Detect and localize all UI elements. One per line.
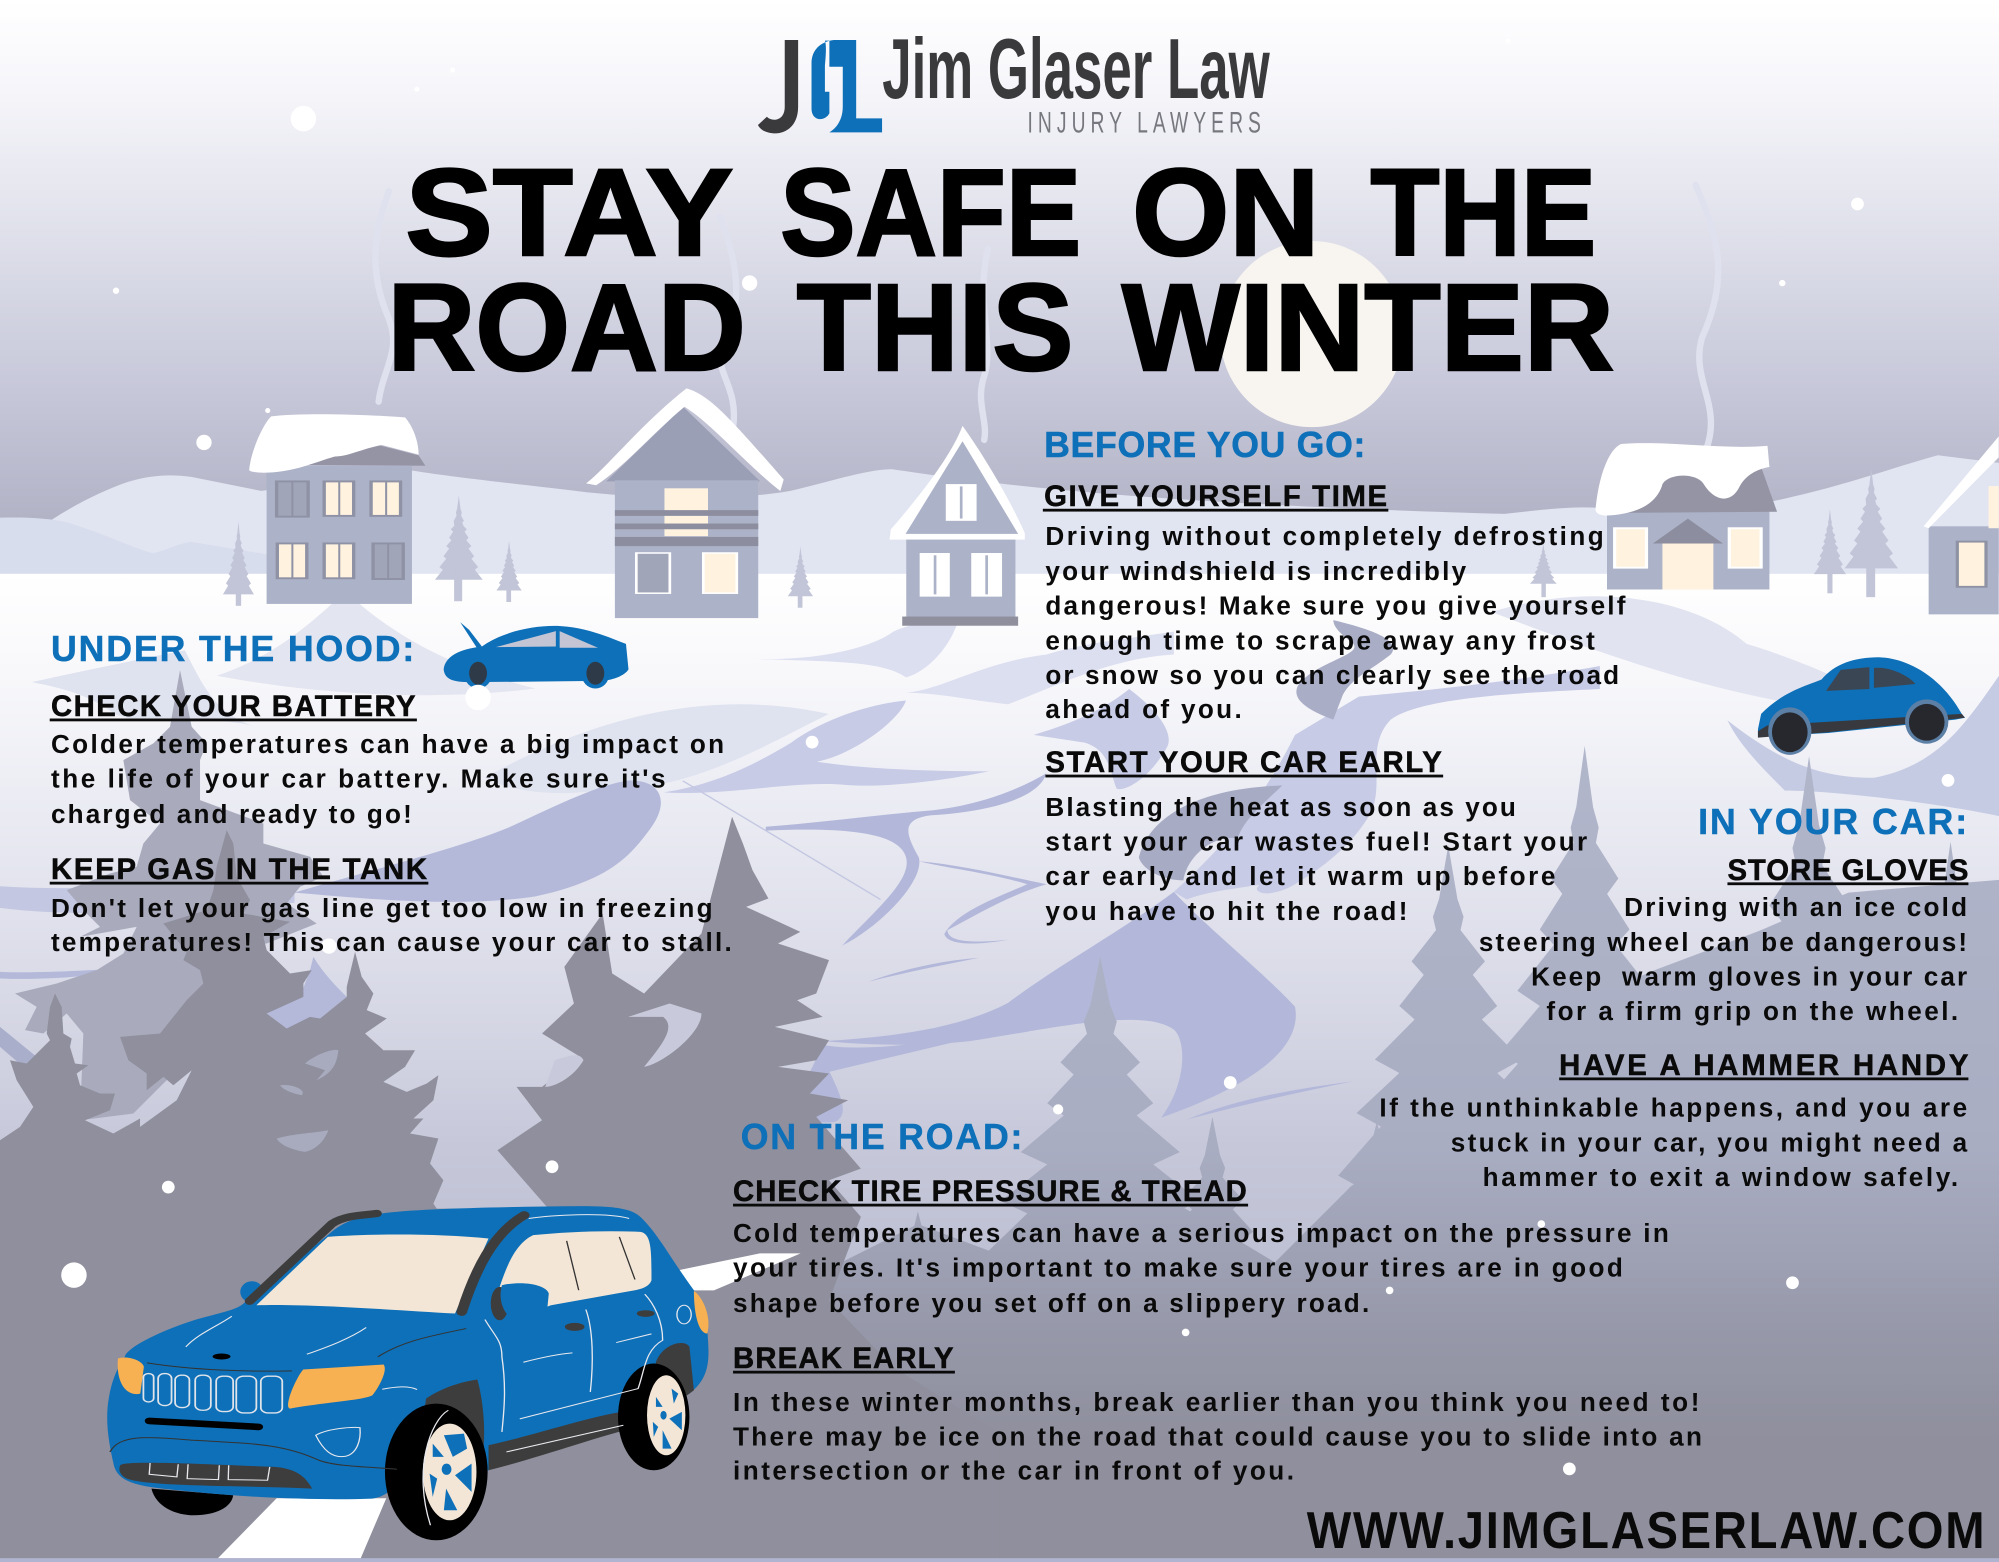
tip: check tire pressure and tread: CHECK TIRE PRESSURE & TREAD [733, 1175, 1247, 1208]
logo mark JGL [758, 40, 882, 133]
tip: have a hammer handy: stuck in your car, you might need a [1451, 1127, 1968, 1157]
tip: give yourself time: your windshield is incredibly [1045, 556, 1467, 586]
bumper and details [119, 1463, 312, 1489]
section: in your car [1379, 802, 1969, 1192]
snowfield [0, 574, 1999, 1562]
tip: give yourself time: or snow so you can clearly see the road [1045, 660, 1619, 690]
tip: keep gas in the tank: KEEP GAS IN THE TANK [51, 853, 427, 886]
road stripe [218, 1253, 801, 1558]
tip: check your battery: CHECK YOUR BATTERY [51, 690, 416, 723]
left background pine trees and lower-left drifts [0, 670, 347, 1120]
title: THE [1370, 144, 1596, 282]
tip: start your car early [1045, 746, 1587, 926]
title: ROAD [388, 259, 746, 397]
tip: store gloves: Keep warm gloves in your car [1531, 962, 1967, 992]
grille [143, 1374, 282, 1413]
title: SAFE [780, 144, 1081, 282]
house 5 [1924, 436, 1999, 614]
house 3 [890, 426, 1025, 626]
title: STAY [405, 144, 733, 282]
tip: store gloves [1479, 854, 1968, 1026]
tip: check your battery: Colder temperatures can have a big impact on [51, 729, 724, 759]
wheel arches [417, 1380, 484, 1464]
title: WINTER [1122, 259, 1614, 397]
tip: give yourself time: GIVE YOURSELF TIME [1044, 480, 1387, 513]
left and right blue drifts [0, 676, 1999, 913]
house group right [1530, 436, 1999, 755]
tip: break early: BREAK EARLY [733, 1342, 954, 1375]
tip: check tire pressure and tread [733, 1175, 1669, 1318]
heading: IN YOUR CAR: [1698, 802, 1967, 842]
tip: break early [733, 1342, 1702, 1486]
smoke wisps [375, 185, 1718, 459]
tip: start your car early: START YOUR CAR EARLY [1045, 746, 1442, 779]
tip: have a hammer handy: HAVE A HAMMER HANDY [1559, 1049, 1969, 1082]
front wheel [385, 1404, 488, 1540]
heading: ON THE ROAD: [741, 1117, 1022, 1157]
logo [758, 22, 1270, 140]
house 2 [586, 388, 784, 618]
large blue SUV [107, 1206, 709, 1540]
logo tagline: INJURY LAWYERS [1028, 107, 1266, 140]
tip: start your car early: car early and let it warm up before [1045, 861, 1555, 891]
tip: keep gas in the tank: Don't let your gas line get too low in freezing [51, 893, 713, 923]
section: on the road [733, 1117, 1702, 1486]
heading: UNDER THE HOOD: [51, 629, 414, 669]
tip: keep gas in the tank [50, 853, 732, 957]
moon [1220, 241, 1404, 427]
title: THIS [797, 259, 1073, 397]
tip: have a hammer handy: If the unthinkable happens, and you are [1379, 1092, 1967, 1122]
tip: break early: There may be ice on the road that could cause you to slide into an [733, 1421, 1702, 1451]
blue drifts and winding road [664, 620, 1600, 1123]
heading: BEFORE YOU GO: [1044, 425, 1365, 465]
blue sedan with open hood [444, 622, 629, 689]
second tree silhouette [383, 817, 1000, 1562]
section: before you go [1043, 425, 1626, 926]
section: under the hood [50, 629, 732, 957]
logo wordmark: Jim Glaser Law [882, 22, 1270, 117]
body [107, 1206, 709, 1499]
small bare trees [223, 496, 813, 608]
tip: start your car early: Blasting the heat as soon as you [1045, 792, 1516, 822]
tip: check your battery [50, 690, 724, 829]
tip: check your battery: the life of your car battery. Make sure it's [51, 764, 665, 794]
tip: start your car early: you have to hit the road! [1045, 896, 1407, 926]
windshield [256, 1235, 489, 1314]
rear wheel [618, 1364, 689, 1470]
tip: check tire pressure and tread: Cold temperatures can have a serious impact on the pressure in [733, 1218, 1669, 1248]
snow drifts [32, 593, 1912, 793]
tip: keep gas in the tank: temperatures! This can cause your car to stall. [51, 927, 732, 957]
tip: store gloves: Driving with an ice cold [1624, 892, 1967, 922]
tip: give yourself time: enough time to scrape away any frost [1045, 626, 1595, 656]
bottom strip [0, 1558, 1999, 1562]
distant snowy hills [0, 455, 1999, 576]
tip: start your car early: start your car wastes fuel! Start your [1045, 826, 1587, 856]
tip: check your battery: charged and ready to go! [51, 799, 412, 829]
tip: store gloves: steering wheel can be dangerous! [1479, 927, 1967, 957]
main tree silhouette [0, 830, 443, 1562]
tip: give yourself time: Driving without completely defrosting [1045, 521, 1604, 551]
headlights [118, 1291, 708, 1409]
tip: store gloves: for a firm grip on the wheel. [1546, 996, 1958, 1026]
tip: give yourself time: ahead of you. [1045, 694, 1242, 724]
tip: check tire pressure and tread: shape before you set off on a slippery road. [733, 1288, 1369, 1318]
tip: have a hammer handy [1379, 1049, 1969, 1192]
blue beetle car [1758, 657, 1965, 755]
pillars [250, 1214, 524, 1312]
tip: give yourself time [1043, 480, 1626, 724]
foreground pine trees [0, 817, 1000, 1562]
tip: check tire pressure and tread: your tires. It's important to make sure your tires are in good [733, 1252, 1623, 1282]
title [388, 144, 1614, 397]
background: winter sky [0, 0, 1999, 576]
tip: store gloves: STORE GLOVES [1727, 854, 1968, 887]
small bare trees [1530, 469, 1898, 597]
front-left tire [151, 1489, 233, 1515]
tip: give yourself time: dangerous! Make sure you give yourself [1045, 591, 1626, 621]
sill [489, 1410, 638, 1470]
house 4 [1596, 443, 1777, 589]
side windows [500, 1231, 651, 1307]
house group left [223, 388, 1025, 626]
tip: break early: intersection or the car in front of you. [733, 1456, 1294, 1486]
house 1 [249, 414, 425, 604]
side mirror [491, 1283, 549, 1320]
tip: have a hammer handy: hammer to exit a window safely. [1483, 1162, 1958, 1192]
title: ON [1132, 144, 1319, 282]
tip: break early: In these winter months, break earlier than you think you need to! [733, 1387, 1699, 1417]
right background pine trees [829, 746, 1999, 1558]
